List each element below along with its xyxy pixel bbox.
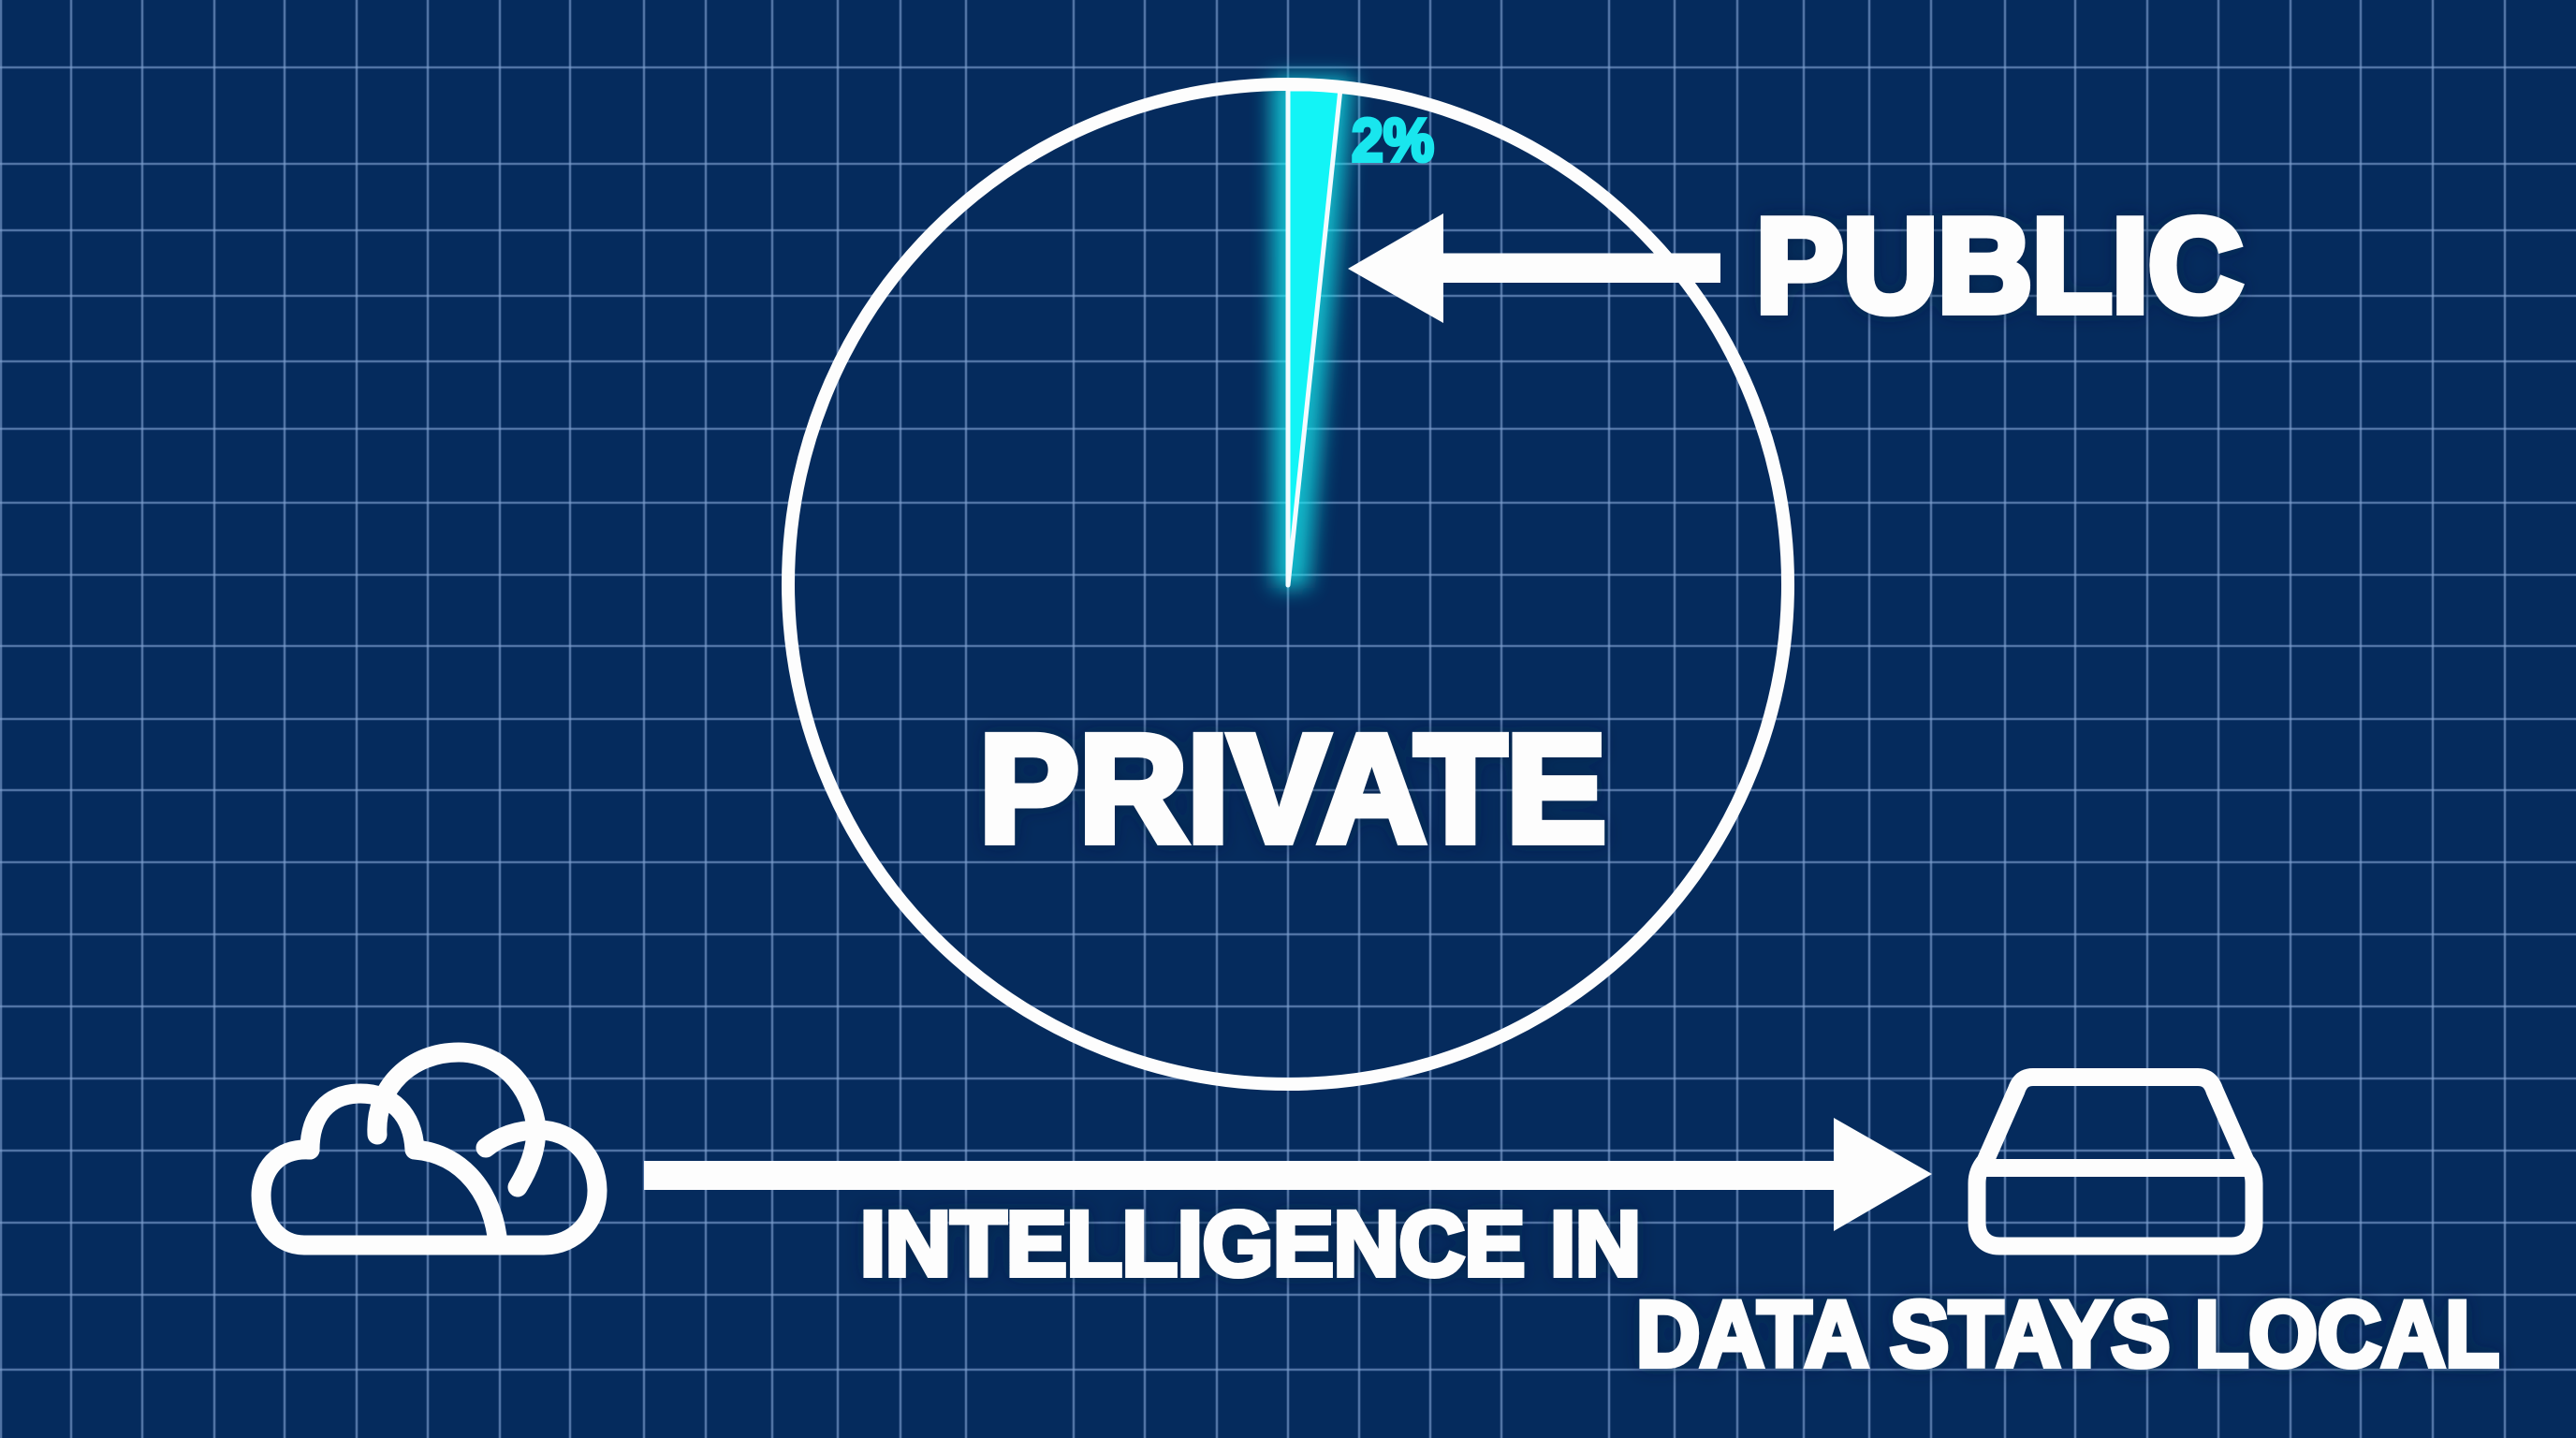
icon: local server [1977,1077,2254,1246]
label: DATA STAYS LOCAL: DATA STAYS LOCAL [1636,1282,2499,1386]
heading: PRIVATE: PRIVATE [979,702,1606,874]
arrow: intelligence flowing in [644,1118,1932,1231]
arrow: public label to wedge [1348,213,1720,323]
2% public wedge [1288,89,1340,585]
label: INTELLIGENCE IN: INTELLIGENCE IN [860,1193,1641,1295]
private circle outline [788,84,1788,1084]
icon: cloud [261,1052,597,1245]
pie chart: 2% public wedge inside private circle [788,77,1788,1084]
2% label: 2% [1352,106,1434,174]
heading: PUBLIC: PUBLIC [1756,191,2243,341]
wedge glow [1271,77,1354,588]
